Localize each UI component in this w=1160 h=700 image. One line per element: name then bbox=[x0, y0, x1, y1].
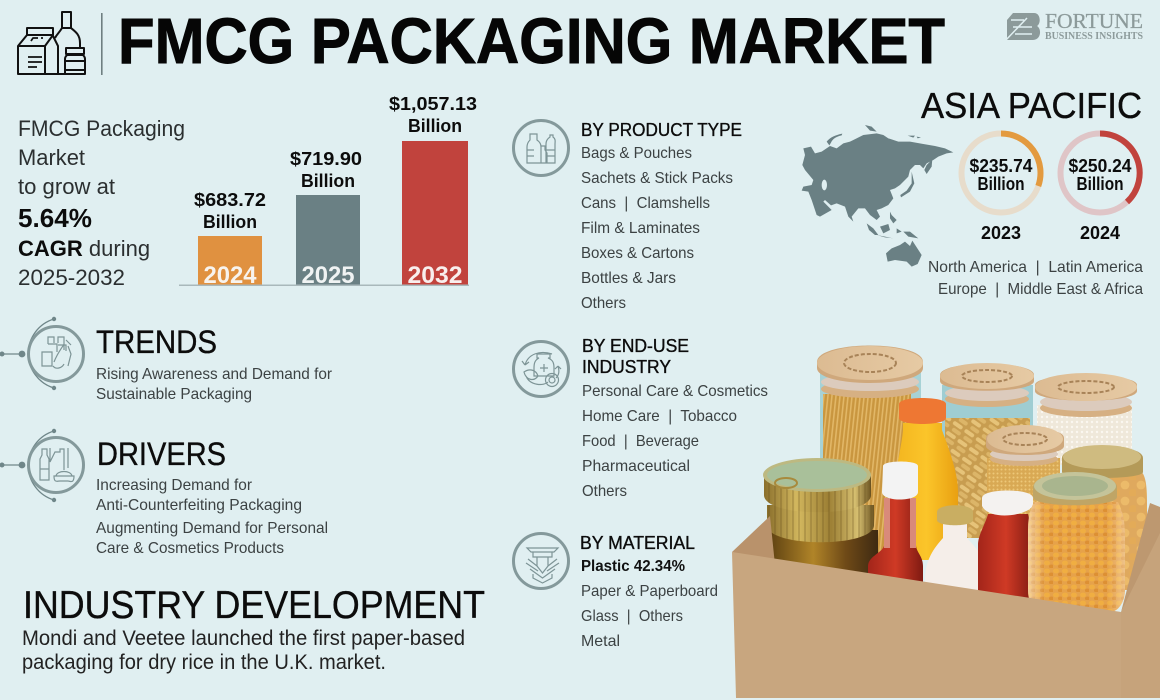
list: Sachets & Stick Packs bbox=[581, 170, 733, 187]
icon: material bbox=[514, 534, 568, 588]
cardboard box bbox=[732, 503, 1160, 698]
bottle: yellow sauce bbox=[895, 398, 958, 560]
description: Sustainable Packaging bbox=[96, 386, 252, 403]
bar 2024: $683.72 bbox=[194, 189, 266, 210]
list: Personal Care & Cosmetics bbox=[582, 383, 768, 400]
list: Bags & Pouches bbox=[581, 145, 692, 162]
list bbox=[582, 383, 768, 500]
bar 2024 bbox=[194, 189, 266, 289]
bottle: red hot sauce bbox=[868, 462, 923, 585]
list: Cans | Clamshells bbox=[581, 195, 710, 212]
bar 2032: 2032 bbox=[408, 262, 462, 289]
bar 2032: $1,057.13 bbox=[389, 93, 477, 114]
description: Increasing Demand for bbox=[96, 477, 253, 494]
description: Rising Awareness and Demand for bbox=[96, 366, 333, 383]
icon: trends bbox=[0, 317, 84, 390]
title: FMCG PACKAGING MARKET bbox=[118, 5, 945, 77]
list: Pharmaceutical bbox=[582, 458, 690, 475]
bottle: milk bbox=[925, 505, 988, 598]
logo: Fortune Business Insights: BUSINESS INSIGHTS bbox=[1045, 31, 1143, 42]
text block: CAGR summary: 5.64% bbox=[18, 203, 92, 233]
jar: chickpeas back bbox=[1062, 445, 1147, 590]
donut: 2024 bbox=[1060, 133, 1140, 243]
illustration: box of packaged food bbox=[732, 346, 1160, 698]
tins bbox=[763, 458, 878, 580]
donut: 2024: $250.24 bbox=[1068, 156, 1132, 176]
list bbox=[581, 145, 733, 312]
icon: packaging products bbox=[18, 12, 85, 74]
donut: 2024: Billion bbox=[1076, 174, 1124, 194]
bar 2025 bbox=[290, 148, 362, 289]
list: Bottles & Jars bbox=[581, 270, 676, 287]
heading: INDUSTRY bbox=[582, 357, 671, 377]
heading: DRIVERS bbox=[97, 436, 226, 472]
map: Asia Pacific bbox=[802, 125, 953, 267]
jar: penne bbox=[940, 363, 1034, 538]
list bbox=[581, 558, 718, 650]
panel: industry development bbox=[22, 584, 485, 674]
panel: trends bbox=[0, 317, 333, 403]
description bbox=[96, 477, 328, 557]
list: Home Care | Tobacco bbox=[582, 408, 737, 425]
panel: drivers bbox=[0, 429, 328, 557]
donut: 2024: 2024 bbox=[1080, 223, 1120, 243]
heading: BY PRODUCT TYPE bbox=[581, 120, 742, 140]
panel: by product type bbox=[514, 120, 742, 312]
description: Mondi and Veetee launched the first paper-based bbox=[22, 627, 465, 650]
logo: Fortune Business Insights: FORTUNE bbox=[1045, 9, 1143, 33]
jar: lentils bbox=[1028, 472, 1125, 612]
other regions: North America | Latin America bbox=[928, 259, 1143, 276]
bar 2025: $719.90 bbox=[290, 148, 362, 169]
list: Boxes & Cartons bbox=[581, 245, 694, 262]
text block: CAGR summary: FMCG Packaging bbox=[18, 116, 185, 141]
list: Film & Laminates bbox=[581, 220, 700, 237]
bar 2032 bbox=[389, 93, 477, 289]
list: Plastic 42.34% bbox=[581, 558, 685, 575]
heading bbox=[582, 336, 689, 377]
text block: CAGR summary: Market bbox=[18, 145, 85, 170]
text block: CAGR summary: 2025-2032 bbox=[18, 265, 125, 290]
list: Food | Beverage bbox=[582, 433, 699, 450]
logo: Fortune Business Insights bbox=[1005, 9, 1143, 42]
description: Care & Cosmetics Products bbox=[96, 540, 284, 557]
bar 2025: 2025 bbox=[302, 262, 354, 289]
description: Anti-Counterfeiting Packaging bbox=[96, 497, 302, 514]
icon: end-use bbox=[514, 342, 568, 396]
header divider bbox=[101, 13, 103, 75]
heading: ASIA PACIFIC bbox=[921, 85, 1142, 126]
heading: BY END-USE bbox=[582, 336, 689, 356]
list: Metal bbox=[581, 633, 620, 650]
description bbox=[22, 627, 465, 674]
donut: 2023: Billion bbox=[978, 174, 1024, 194]
icon: bottles bbox=[514, 120, 568, 176]
donut: 2023: $235.74 bbox=[970, 156, 1032, 176]
jar: grains bbox=[986, 425, 1064, 518]
bar 2032: Billion bbox=[408, 115, 462, 136]
description bbox=[96, 366, 333, 403]
other regions bbox=[928, 259, 1143, 298]
bar 2024: Billion bbox=[203, 211, 257, 232]
jar: spaghetti bbox=[817, 346, 923, 564]
heading: TRENDS bbox=[96, 324, 217, 360]
other regions: Europe | Middle East & Africa bbox=[938, 281, 1143, 298]
text block: CAGR summary: to grow at bbox=[18, 174, 115, 199]
text block: CAGR summary bbox=[18, 116, 185, 290]
bar 2025: Billion bbox=[301, 170, 355, 191]
description: Augmenting Demand for Personal bbox=[96, 520, 328, 537]
panel: by material bbox=[514, 533, 718, 650]
text block: CAGR summary: CAGR during bbox=[18, 236, 150, 261]
donut: 2023: 2023 bbox=[981, 223, 1021, 243]
bar chart: market size bbox=[179, 93, 477, 289]
list: Others bbox=[581, 295, 626, 312]
panel: asia pacific bbox=[802, 85, 1143, 298]
heading: INDUSTRY DEVELOPMENT bbox=[23, 584, 485, 627]
list: Others bbox=[582, 483, 627, 500]
list: Glass | Others bbox=[581, 608, 683, 625]
icon: drivers bbox=[0, 429, 84, 502]
jar: ketchup bbox=[978, 490, 1034, 602]
description: packaging for dry rice in the U.K. market. bbox=[22, 651, 386, 674]
bar 2024: 2024 bbox=[204, 262, 257, 289]
panel: by end-use industry bbox=[514, 336, 768, 500]
donut: 2023 bbox=[962, 134, 1041, 243]
heading: BY MATERIAL bbox=[580, 533, 695, 553]
list: Paper & Paperboard bbox=[581, 583, 718, 600]
jar: rice bbox=[1035, 373, 1137, 465]
